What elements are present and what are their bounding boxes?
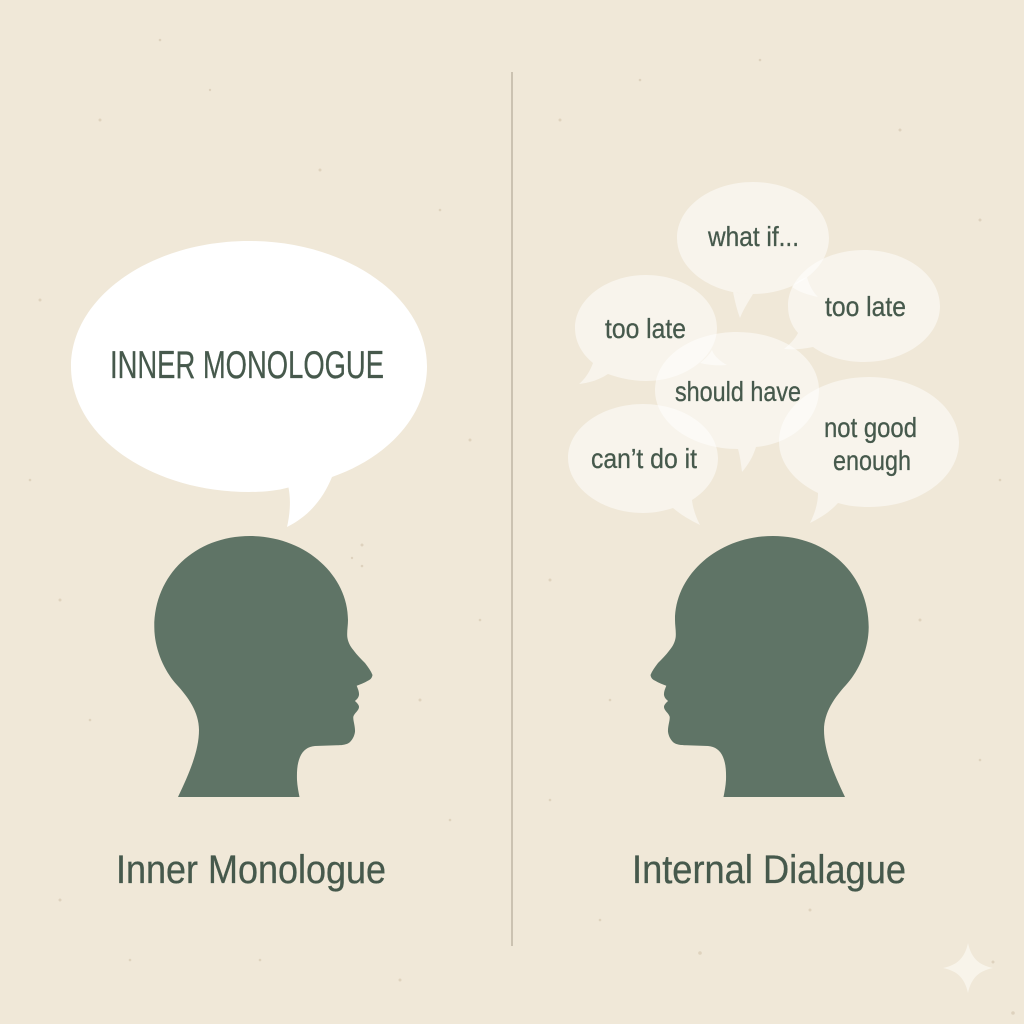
bubble: what if: what if... <box>707 221 799 252</box>
speech bubble cluster <box>568 182 959 525</box>
bubble: can't do it <box>568 404 718 525</box>
panel: inner monologue <box>71 241 427 892</box>
icon: head silhouette facing left <box>650 536 869 797</box>
overlap highlights: hidden bubble tails <box>700 277 818 365</box>
bubble: not good enough: enough <box>833 445 911 476</box>
bubble: too late right: too late <box>825 291 906 322</box>
bubble: not good enough <box>779 377 959 523</box>
bubble text: INNER MONOLOGUE <box>110 344 384 387</box>
bubble: what if <box>677 182 829 318</box>
bubble: should have: should have <box>675 376 801 407</box>
panel: internal dialague <box>568 182 959 892</box>
label: inner monologue: Inner Monologue <box>116 848 386 892</box>
bubble: should have <box>655 332 819 472</box>
bubble: too late right <box>784 250 940 362</box>
icon: head silhouette facing right <box>154 536 372 797</box>
bubble: too late left: too late <box>605 313 686 344</box>
label: internal dialague: Internal Dialague <box>632 848 906 892</box>
icon: sparkle <box>943 943 993 993</box>
divider line <box>511 72 513 946</box>
bubble: too late left <box>575 275 717 384</box>
bubble: not good enough: not good <box>824 412 917 443</box>
large speech bubble <box>71 241 427 527</box>
bubble: can't do it: can’t do it <box>591 443 697 474</box>
